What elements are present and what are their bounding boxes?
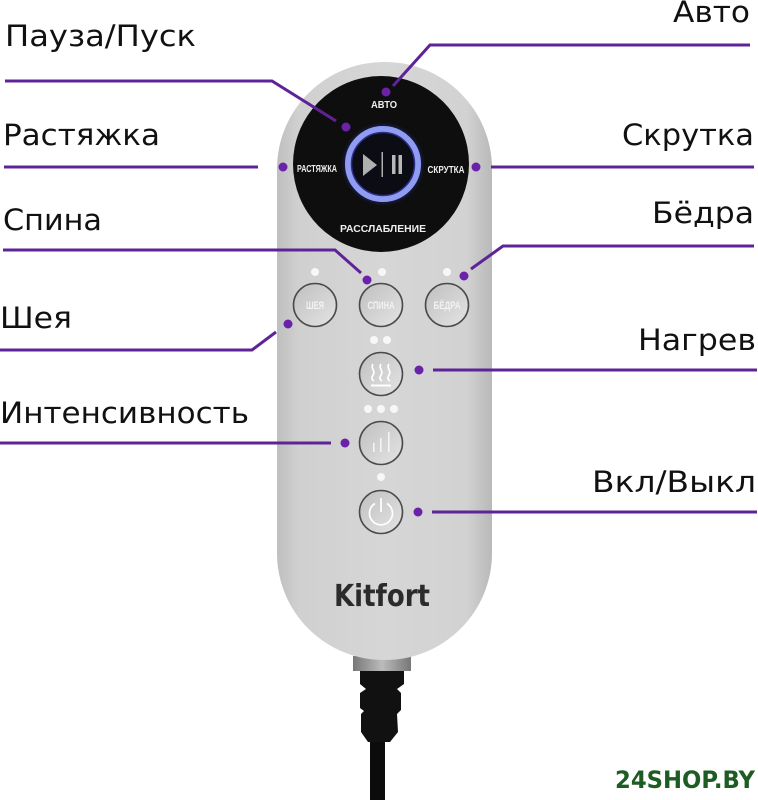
- logo: Kitfort: Kitfort: [334, 579, 430, 614]
- label: АВТО: АВТО: [371, 99, 397, 111]
- callout: Интенсивность: Интенсивность: [0, 396, 249, 430]
- icon: pause: [392, 155, 402, 174]
- callout: Нагрев: [414, 323, 757, 374]
- button: СПИНА: СПИНА: [368, 300, 395, 312]
- callout: Авто: [382, 0, 750, 96]
- callout: Пауза/Пуск: [5, 19, 350, 132]
- callout: Шея: Шея: [0, 301, 72, 335]
- callout: Бёдра: [460, 196, 754, 280]
- label: СКРУТКА: СКРУТКА: [428, 164, 465, 176]
- callout: Интенсивность: [0, 396, 350, 448]
- callout: Спина: Спина: [3, 203, 102, 237]
- callout: Спина: [3, 203, 372, 284]
- control dial: [293, 76, 469, 252]
- callout: Бёдра: Бёдра: [652, 196, 754, 230]
- remote body: [277, 62, 492, 660]
- button: ШЕЯ: ШЕЯ: [306, 300, 324, 312]
- button: power: [360, 490, 402, 534]
- callout: Скрутка: [472, 118, 754, 172]
- callout: Пауза/Пуск: Пауза/Пуск: [5, 19, 196, 53]
- callout: Шея: [0, 301, 292, 350]
- label: РАСТЯЖКА: РАСТЯЖКА: [297, 163, 337, 175]
- callout: Скрутка: Скрутка: [622, 118, 754, 152]
- button: intensity: [360, 422, 402, 464]
- indicator LEDs: [311, 268, 451, 481]
- callout: Растяжка: [3, 118, 288, 172]
- callout: Нагрев: Нагрев: [638, 323, 756, 357]
- button: БЁДРА: БЁДРА: [434, 299, 461, 312]
- cable and strain relief: [353, 656, 411, 800]
- button: БЁДРА: [426, 284, 468, 326]
- button: heat: [360, 352, 402, 396]
- callout: Растяжка: Растяжка: [3, 118, 160, 152]
- button: ШЕЯ: [294, 284, 336, 326]
- button: СПИНА: [360, 284, 402, 326]
- glowing play/pause ring: [341, 122, 425, 206]
- callout: Вкл/Выкл: Вкл/Выкл: [592, 465, 756, 499]
- callout: Вкл/Выкл: [414, 465, 757, 516]
- label: РАССЛАБЛЕНИЕ: РАССЛАБЛЕНИЕ: [340, 223, 426, 235]
- icon: play: [363, 154, 377, 176]
